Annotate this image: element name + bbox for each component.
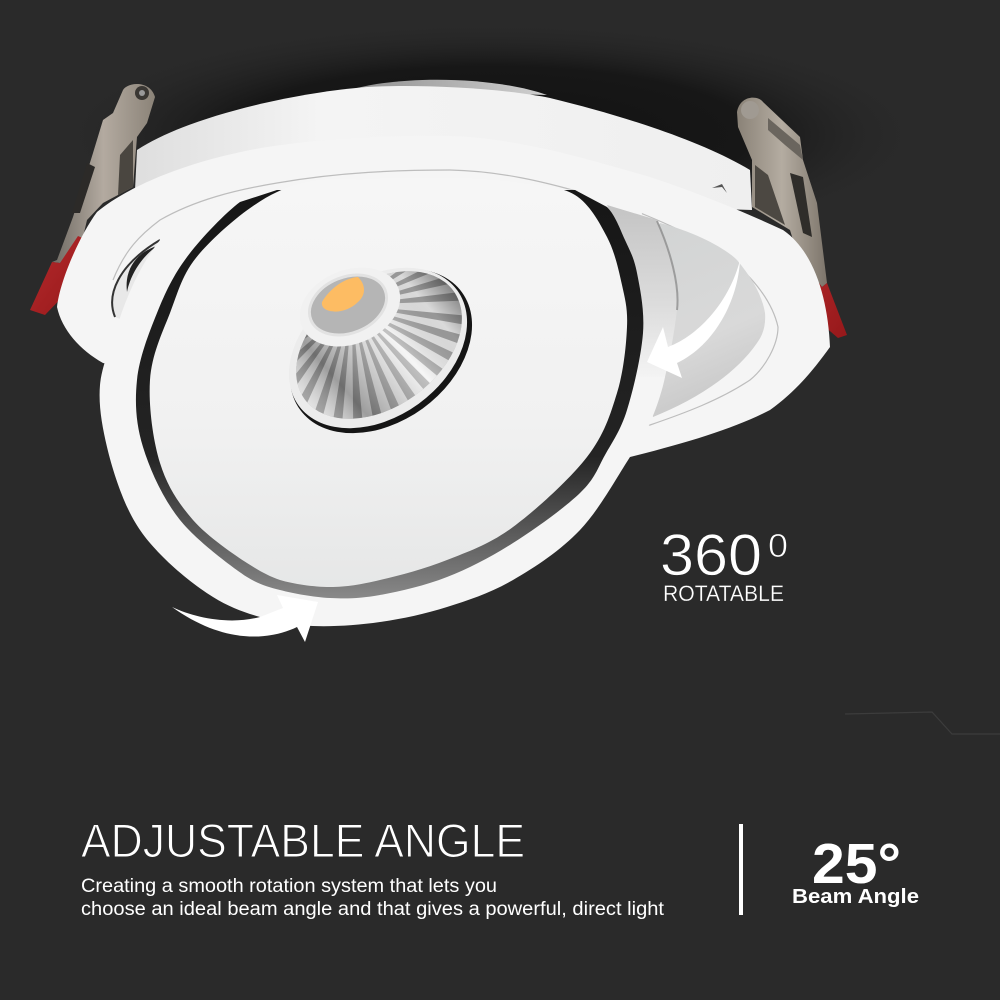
360 rotatable label: 360	[660, 523, 762, 588]
right spring clip	[737, 98, 847, 338]
reflector	[290, 268, 472, 434]
360 rotatable label	[660, 523, 788, 606]
tilting disc outer rim	[100, 172, 665, 626]
soft shadow behind the fitting	[50, 20, 930, 250]
upper rotation arrow	[647, 260, 740, 378]
small screw	[712, 184, 727, 193]
description text: Creating a smooth rotation system that lets you	[81, 876, 497, 897]
outer housing flange	[57, 136, 830, 457]
flange inner lip line	[113, 170, 778, 428]
reflector collar	[288, 253, 412, 361]
black ring groove	[136, 190, 643, 598]
360 rotatable label: 0	[768, 527, 788, 564]
divider	[739, 824, 743, 915]
recessed housing cylinder	[135, 86, 752, 210]
inner disc	[150, 178, 627, 587]
decorative line	[845, 712, 1000, 734]
lower rotation arrow	[172, 595, 318, 642]
right cavity inside the housing	[625, 223, 765, 417]
description text	[81, 876, 665, 920]
left pocket in the housing	[112, 240, 160, 325]
description text: choose an ideal beam angle and that gives a powerful, direct light	[81, 899, 665, 920]
product: rotatable downlight	[30, 80, 847, 642]
360 rotatable label: ROTATABLE	[663, 581, 784, 606]
beam angle stat	[792, 832, 919, 908]
rear housing edge	[350, 80, 547, 95]
side wall of the tilting disc	[607, 205, 678, 377]
shadow between wall and cavity	[657, 221, 678, 310]
heading: ADJUSTABLE ANGLE	[81, 815, 525, 868]
LED chip	[322, 277, 364, 312]
beam angle stat: 25°	[812, 832, 901, 896]
left spring clip	[30, 84, 155, 315]
beam angle stat: Beam Angle	[792, 886, 919, 908]
